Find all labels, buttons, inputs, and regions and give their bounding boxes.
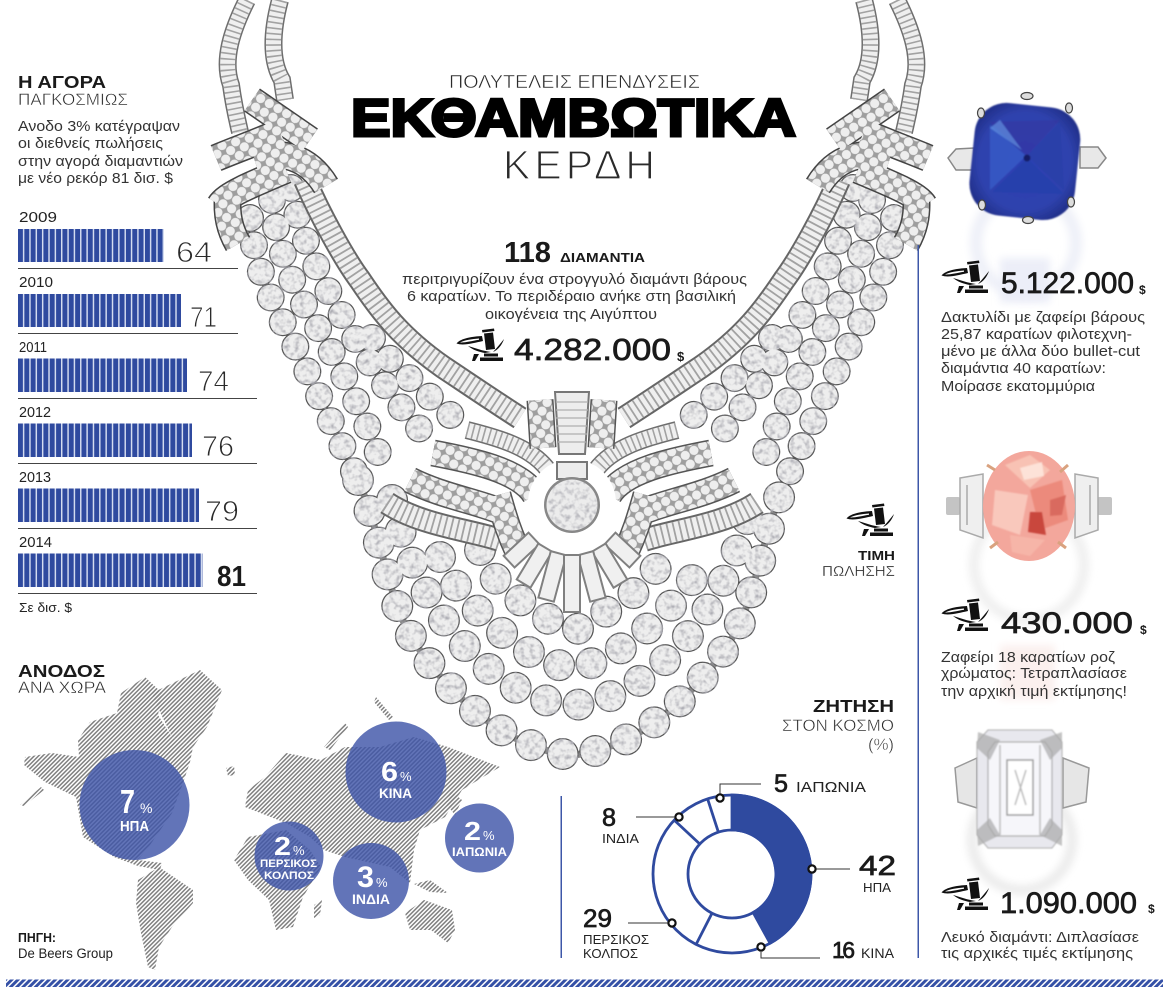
bar chart — [18, 210, 257, 594]
necklace photograph — [216, 0, 928, 755]
icon: gavel — [942, 878, 989, 910]
bar 2014 — [18, 535, 257, 594]
bar 2012: 2012 — [19, 405, 51, 421]
source note: ΠΗΓΗ: — [18, 930, 56, 945]
bar 2012: 76 — [202, 431, 234, 463]
sapphire price: 5.122.000 — [1001, 267, 1134, 300]
chart markers — [668, 794, 816, 951]
panel: sapphire ring — [941, 92, 1146, 395]
bubble: USA 7%: % — [140, 800, 152, 816]
sapphire description: Δακτυλίδι με ζαφείρι βάρους — [941, 310, 1145, 326]
panel: white diamond ring — [941, 730, 1155, 962]
title block — [351, 72, 796, 188]
count headline: ΔΙΑΜΑΝΤΙΑ — [560, 250, 646, 265]
heading: Η ΑΓΟΡΑ — [18, 72, 106, 92]
panel: global market — [18, 72, 257, 615]
bar 2011 — [18, 340, 257, 399]
bar 2009: 64 — [176, 237, 212, 269]
bar 2013 — [18, 470, 257, 529]
label: India 8: ΙΝΔΙΑ — [602, 831, 639, 846]
label: India 8 — [602, 804, 639, 846]
bubble: USA 7% — [80, 750, 190, 860]
heading: ΠΑΓΚΟΣΜΙΩΣ — [18, 90, 128, 109]
bubble: Persian Gulf 2%: ΠΕΡΣΙΚΟΣ — [260, 858, 317, 870]
subtitle: ΚΕΡΔΗ — [503, 142, 655, 188]
label: Persian Gulf 29: 29 — [583, 905, 612, 933]
bar 2009 — [18, 210, 238, 269]
necklace description: περιτριγυρίζουν ένα στρογγυλό διαμάντι βάρους — [402, 272, 747, 288]
bubble: Persian Gulf 2%: % — [293, 843, 305, 858]
main title: ΕΚΘΑΜΒΩΤΙΚΑ — [351, 89, 796, 148]
label: Persian Gulf 29: ΚΟΛΠΟΣ — [583, 946, 638, 961]
donut chart — [653, 795, 811, 953]
pink sapphire description: χρώματος: Τετραπλασίασε — [941, 666, 1128, 682]
label: China 16 — [832, 937, 894, 963]
label: USA 42 — [859, 850, 896, 895]
heading — [18, 661, 107, 697]
bubble: Persian Gulf 2% — [254, 822, 324, 890]
bubble: Persian Gulf 2%: 2 — [274, 831, 291, 861]
white diamond price: 1.090.000 — [1000, 887, 1137, 920]
bubble: India 3%: % — [376, 875, 388, 890]
pink sapphire price: $ — [1140, 623, 1147, 637]
bar 2010: 2010 — [19, 275, 53, 291]
label: USA 42: 42 — [859, 850, 896, 881]
hatched world map — [20, 670, 500, 970]
panel: world demand — [583, 696, 896, 963]
bubble: Persian Gulf 2%: ΚΟΛΠΟΣ — [264, 870, 314, 882]
bar 2012 — [18, 405, 257, 464]
bubble: China 6%: 6 — [381, 756, 398, 787]
legend: sale price — [822, 504, 895, 580]
white diamond description: Λευκό διαμάντι: Διπλασίασε — [941, 930, 1140, 946]
bubble: USA 7%: ΗΠΑ — [120, 819, 149, 835]
label: Persian Gulf 29 — [583, 905, 649, 961]
intro text: με νέο ρεκόρ 81 δισ. $ — [18, 171, 173, 187]
bubble: USA 7%: 7 — [120, 783, 135, 820]
heading — [18, 72, 128, 109]
bubble: India 3%: 3 — [357, 861, 374, 894]
icon: gavel — [456, 328, 504, 361]
pink sapphire description: την αρχική τιμή εκτίμησης! — [941, 684, 1127, 700]
necklace description: οικογένεια της Αιγύπτου — [485, 307, 657, 323]
heading: ΖΗΤΗΣΗ — [813, 696, 894, 716]
leader lines — [628, 784, 850, 958]
bubble: Japan 2%: 2 — [464, 816, 481, 846]
pink sapphire price: 430.000 — [1001, 607, 1133, 640]
label: Persian Gulf 29: ΠΕΡΣΙΚΟΣ — [583, 932, 649, 947]
white diamond description — [941, 930, 1140, 962]
icon: gavel — [846, 504, 894, 536]
panel: pink sapphire ring — [941, 451, 1147, 700]
panel: growth by country — [18, 661, 514, 970]
sapphire description: Μοίρασε εκατομμύρια — [941, 379, 1095, 395]
heading — [782, 696, 894, 754]
intro text — [18, 119, 183, 187]
heading: (%) — [868, 735, 894, 754]
label: USA 42: ΗΠΑ — [863, 880, 891, 895]
sapphire price: $ — [1139, 283, 1146, 297]
heading: ΑΝΑ ΧΩΡΑ — [18, 678, 107, 697]
heading: ΣΤΟΝ ΚΟΣΜΟ — [782, 716, 894, 735]
sapphire description — [941, 310, 1145, 395]
centre necklace caption — [402, 237, 747, 367]
bar 2010: 71 — [190, 302, 217, 334]
count headline — [504, 237, 646, 269]
icon: gavel — [942, 598, 989, 631]
sapphire description: 25,87 καρατίων φιλοτεχνη- — [941, 327, 1132, 343]
bubble: India 3%: ΙΝΔΙΑ — [352, 892, 390, 907]
bar 2011: 74 — [198, 366, 229, 398]
bar 2009: 2009 — [19, 210, 57, 226]
legend text: ΠΩΛΗΣΗΣ — [822, 563, 895, 580]
label: China 16: ΚΙΝΑ — [861, 946, 894, 961]
bubble: China 6% — [346, 722, 446, 822]
segment: USA 42 — [732, 795, 811, 943]
label: Japan 5: 5 — [774, 770, 788, 798]
pink sapphire description: Ζαφείρι 18 καρατίων ροζ — [941, 650, 1116, 666]
bubble: Japan 2%: ΙΑΠΩΝΙΑ — [452, 845, 507, 859]
label: China 16: 16 — [832, 937, 855, 963]
necklace description: 6 καρατίων. Το περιδέραιο ανήκε στη βασιλική — [407, 289, 736, 305]
ring photo: pink sapphire — [946, 451, 1112, 700]
necklace price: 4.282.000 — [514, 332, 671, 367]
count headline: 118 — [504, 237, 551, 269]
white diamond price: $ — [1148, 902, 1155, 916]
ring photo: white diamond — [955, 730, 1089, 890]
legend text — [822, 548, 895, 580]
label: India 8: 8 — [602, 804, 616, 832]
bar 2014: 2014 — [19, 535, 52, 551]
ring photo: sapphire — [948, 92, 1106, 303]
bubble: India 3% — [333, 843, 409, 919]
bar 2014: 81 — [217, 561, 246, 593]
label: Japan 5 — [774, 770, 866, 798]
bottom hatched band — [6, 980, 1163, 987]
bubble: China 6%: ΚΙΝΑ — [379, 785, 412, 801]
necklace description — [402, 272, 747, 323]
intro text: στην αγορά διαμαντιών — [18, 154, 183, 170]
icon: gavel — [942, 260, 989, 293]
sapphire description: διαμάντια 40 καρατίων: — [941, 361, 1106, 377]
legend text: ΤΙΜΗ — [858, 548, 895, 563]
pink sapphire description — [941, 650, 1128, 700]
bubble: Japan 2% — [445, 804, 514, 872]
necklace price: $ — [677, 349, 685, 364]
bubble: China 6%: % — [400, 769, 412, 784]
unit note: Σε δισ. $ — [19, 600, 73, 615]
bar 2013: 79 — [205, 496, 239, 528]
bar 2010 — [18, 275, 238, 334]
divider: right column rule — [918, 245, 919, 958]
bar 2011: 2011 — [19, 340, 47, 356]
white diamond description: τις αρχικές τιμές εκτίμησης — [941, 946, 1133, 962]
source note: De Beers Group — [18, 946, 113, 961]
bar 2013: 2013 — [19, 470, 51, 486]
divider: demand left rule — [560, 796, 562, 958]
heading: ΑΝΟΔΟΣ — [18, 661, 105, 681]
intro text: Ανοδο 3% κατέγραψαν — [18, 119, 180, 135]
sapphire description: μένο με άλλα δύο bullet-cut — [941, 344, 1140, 360]
label: Japan 5: ΙΑΠΩΝΙΑ — [796, 779, 866, 796]
kicker: ΠΟΛΥΤΕΛΕΙΣ ΕΠΕΝΔΥΣΕΙΣ — [449, 72, 700, 92]
bubble: Japan 2%: % — [483, 828, 495, 843]
source note — [18, 930, 113, 961]
intro text: οι διεθνείς πωλήσεις — [18, 136, 163, 152]
